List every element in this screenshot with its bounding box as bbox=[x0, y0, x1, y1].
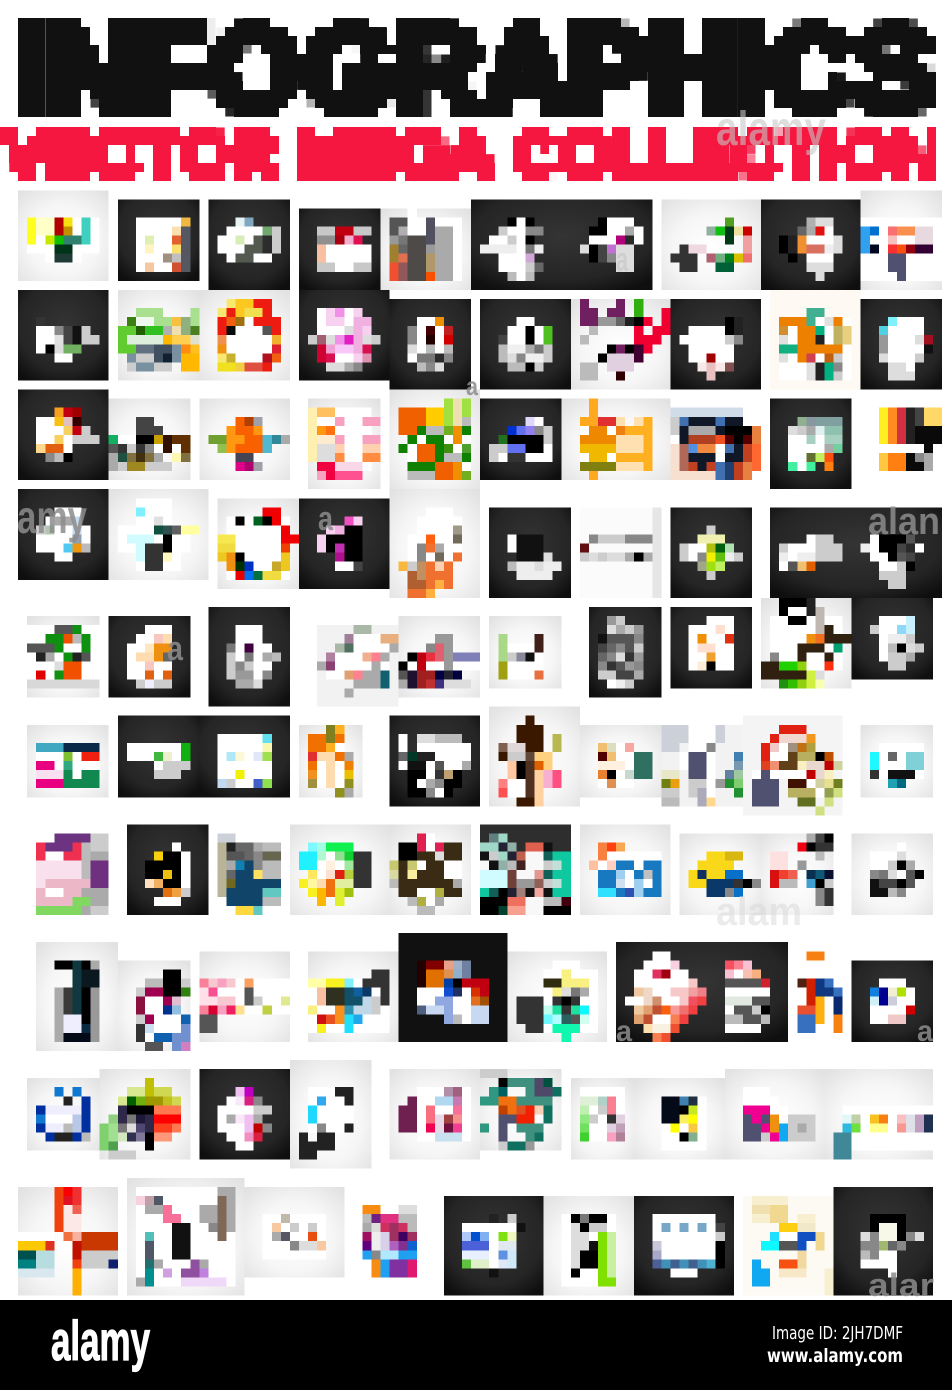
icon: tile 56 bbox=[661, 725, 743, 806]
subtitle: vector mega collection: VECTOR MEGA COLLECTION bbox=[4, 118, 940, 191]
icon: tile 8 bbox=[761, 199, 861, 290]
watermarks: a bbox=[167, 630, 184, 668]
icon: tile 9 bbox=[861, 190, 942, 290]
icon: tile 26 bbox=[562, 399, 670, 480]
icon: tile 67 bbox=[761, 834, 834, 915]
watermarks: alan bbox=[868, 501, 940, 543]
icon: tile 52 bbox=[299, 725, 362, 797]
icon: tile 87 bbox=[824, 1069, 933, 1160]
icon: tile 21 bbox=[109, 399, 190, 480]
icon: tile 92 bbox=[444, 1196, 544, 1296]
icon: tile 85 bbox=[634, 1078, 725, 1160]
icon: tile 7 bbox=[661, 199, 761, 290]
footer bar bbox=[0, 1300, 952, 1390]
icon: tile 68 bbox=[852, 834, 933, 915]
watermarks: a bbox=[318, 500, 334, 538]
icon: tile 35 bbox=[489, 507, 571, 598]
icon: tile 82 bbox=[390, 1069, 480, 1160]
icon: tile 72 bbox=[308, 951, 399, 1042]
icon: tile 59 bbox=[36, 834, 109, 915]
icon: tile 10 bbox=[18, 290, 109, 381]
icon: tile 55 bbox=[580, 725, 661, 797]
icon: tile 89 bbox=[127, 1178, 245, 1296]
icon: tile 43 bbox=[399, 616, 480, 698]
icon: tile 2 bbox=[118, 199, 199, 281]
watermarks: a bbox=[917, 1015, 933, 1048]
icon: tile 80 bbox=[199, 1069, 290, 1160]
icon: tile 37 bbox=[670, 507, 752, 598]
icon: tile 86 bbox=[725, 1069, 824, 1160]
icon: tile 45 bbox=[589, 607, 661, 698]
icon: tile 20 bbox=[18, 390, 109, 480]
icon: tile 1 bbox=[18, 190, 109, 281]
icon: tile 49 bbox=[27, 725, 109, 797]
icon: tile 40 bbox=[109, 616, 190, 698]
icon: tile 28 bbox=[770, 399, 852, 489]
icon: tile 95 bbox=[743, 1196, 834, 1296]
icon: tile 69 bbox=[36, 942, 118, 1051]
icon: tile 71 bbox=[199, 951, 290, 1042]
icon: tile 14 bbox=[390, 299, 471, 390]
icon: tile 18 bbox=[770, 290, 861, 390]
icon: tile 84 bbox=[571, 1078, 634, 1160]
icon: tile 11 bbox=[118, 290, 199, 381]
icon: tile 32 bbox=[217, 498, 299, 589]
icon: tile 13 bbox=[299, 290, 390, 381]
icon: tile 65 bbox=[580, 824, 670, 915]
icon: tile 74 bbox=[507, 951, 607, 1042]
thumbnail mosaic bbox=[18, 190, 942, 1296]
icon: tile 44 bbox=[489, 616, 562, 689]
icon: tile 70 bbox=[118, 960, 190, 1051]
icon: tile 41 bbox=[208, 607, 290, 707]
icon: tile 17 bbox=[670, 299, 761, 390]
icon: tile 15 bbox=[480, 299, 571, 390]
watermarks: alam bbox=[716, 890, 802, 934]
watermarks: alamy bbox=[716, 103, 826, 156]
icon: tile 25 bbox=[480, 399, 562, 480]
icon: tile 23 bbox=[308, 399, 381, 489]
icon: tile 30 bbox=[18, 489, 109, 580]
icon: tile 60 bbox=[127, 824, 208, 915]
icon: tile 3 bbox=[208, 199, 290, 290]
icon: tile 77 bbox=[852, 960, 933, 1042]
footer image id: Image ID: 2JH7DMF bbox=[772, 1323, 903, 1344]
icon: tile 31 bbox=[109, 489, 208, 580]
icon: tile 50 bbox=[118, 716, 199, 797]
icon: tile 19 bbox=[861, 299, 942, 390]
icon: tile 16 bbox=[571, 299, 670, 390]
icon: tile 27 bbox=[670, 408, 761, 480]
icon: tile 6 bbox=[471, 199, 652, 290]
icon: tile 48 bbox=[852, 598, 933, 680]
icon: tile 73 bbox=[399, 933, 507, 1042]
icon: tile 88 bbox=[18, 1187, 118, 1296]
footer logo: alamy: alamy bbox=[51, 1309, 150, 1372]
icon: tile 51 bbox=[199, 716, 290, 797]
icon: tile 63 bbox=[390, 824, 471, 915]
icon: tile 34 bbox=[390, 489, 480, 598]
icon: tile 64 bbox=[480, 824, 571, 915]
icon: tile 36 bbox=[580, 507, 661, 598]
icon: tile 33 bbox=[299, 498, 390, 589]
icon: tile 96 bbox=[834, 1187, 933, 1296]
icon: tile 22 bbox=[199, 399, 290, 480]
watermarks: amy bbox=[17, 491, 87, 543]
icon: tile 54 bbox=[489, 707, 580, 806]
icon: tile 79 bbox=[100, 1069, 190, 1160]
icon: tile 76 bbox=[797, 951, 843, 1033]
watermarks: alar bbox=[868, 1267, 934, 1303]
icon: tile 38 bbox=[770, 507, 942, 598]
icon: tile 39 bbox=[27, 616, 100, 698]
title: infographics: INFOGRAPHICS bbox=[15, 4, 935, 136]
icon: tile 91 bbox=[362, 1205, 417, 1277]
watermarks: a bbox=[616, 1015, 632, 1048]
icon: tile 94 bbox=[634, 1196, 734, 1296]
icon: tile 93 bbox=[544, 1196, 634, 1296]
watermarks: a bbox=[616, 241, 629, 279]
icon: tile 83 bbox=[480, 1069, 562, 1151]
icon: tile 81 bbox=[290, 1060, 371, 1169]
icon: tile 66 bbox=[680, 834, 761, 915]
icon: tile 46 bbox=[670, 607, 752, 689]
icon: tile 78 bbox=[27, 1078, 100, 1151]
icon: tile 24 bbox=[390, 390, 480, 489]
icon: tile 53 bbox=[390, 716, 480, 806]
footer url: www.alamy.com bbox=[767, 1345, 903, 1367]
icon: tile 42 bbox=[317, 625, 399, 707]
icon: tile 61 bbox=[217, 834, 281, 915]
icon: tile 57 bbox=[743, 716, 843, 815]
icon: tile 29 bbox=[879, 408, 942, 471]
icon: tile 47 bbox=[761, 598, 852, 689]
icon: tile 58 bbox=[861, 725, 933, 797]
icon: tile 62 bbox=[290, 824, 390, 915]
icon: tile 90 bbox=[245, 1187, 344, 1277]
icon: tile 5 bbox=[381, 208, 471, 290]
watermarks: a bbox=[466, 371, 478, 401]
icon: tile 4 bbox=[299, 208, 381, 290]
icon: tile 75 bbox=[616, 942, 788, 1042]
icon: tile 12 bbox=[199, 290, 290, 381]
